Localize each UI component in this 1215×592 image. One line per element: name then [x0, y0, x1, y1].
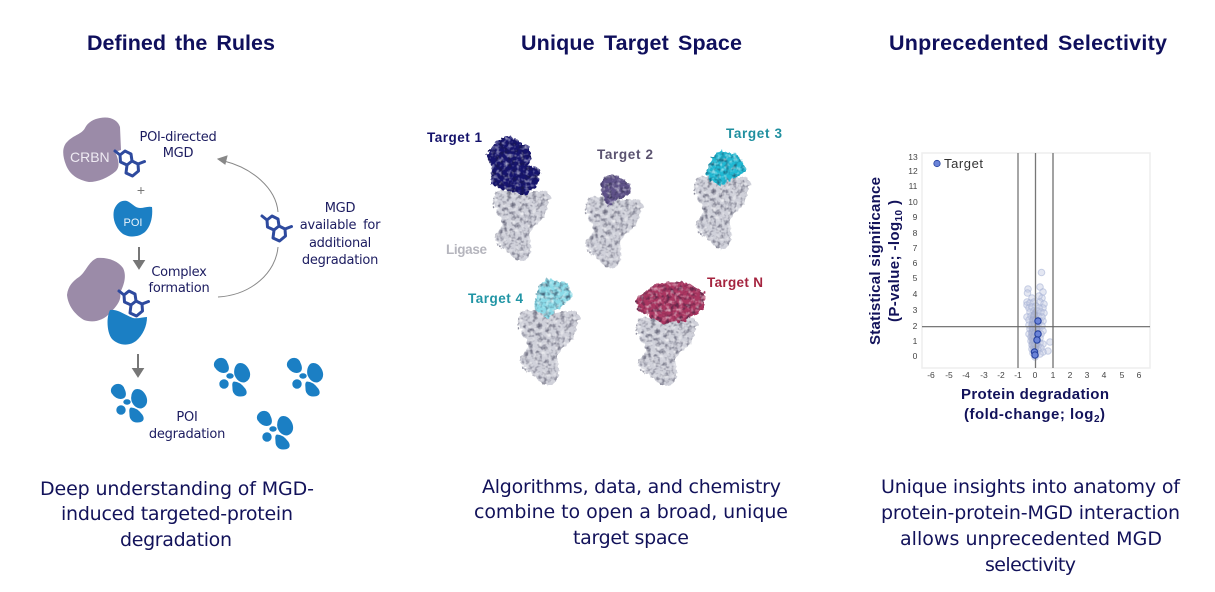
y axis ticks: 12: [908, 166, 918, 176]
text block: deep understanding: [40, 478, 314, 551]
label: complex formation: [149, 265, 209, 296]
y axis ticks: 4: [913, 289, 918, 299]
y axis ticks: 7: [913, 243, 918, 253]
arrow: POI to complex: [134, 247, 144, 268]
x axis ticks: -5: [945, 370, 953, 380]
label: MGD available for additional degradation: MGD: [325, 201, 356, 216]
point cloud: [1024, 269, 1053, 360]
x axis title: ): [1100, 406, 1105, 423]
panel: unique target space: [427, 31, 788, 549]
structure: target 1: Target 1: [427, 130, 482, 145]
y axis ticks: 9: [913, 212, 918, 222]
label: POI-directed MGD: POI-directed: [139, 130, 217, 145]
icon: POI protein: POI: [124, 217, 142, 229]
x axis ticks: -3: [980, 370, 988, 380]
legend: Target: [944, 156, 983, 171]
text block: unique insights: [881, 476, 1181, 576]
y axis ticks: 3: [913, 305, 918, 315]
x axis ticks: 4: [1102, 370, 1107, 380]
plus sign: +: [137, 182, 145, 198]
text block: unique insights: protein-protein-MGD interaction: [881, 502, 1180, 524]
x axis ticks: 1: [1051, 370, 1056, 380]
label: POI degradation: degradation: [149, 427, 225, 442]
y axis title: 10: [894, 210, 905, 221]
y axis ticks: 1: [913, 336, 918, 346]
structure: target 4: Target 4: [468, 291, 523, 306]
label: MGD available for additional degradation: [300, 201, 381, 268]
arrow: complex to degradation: [134, 354, 142, 376]
y axis ticks: 10: [908, 197, 918, 207]
x axis ticks: -6: [927, 370, 935, 380]
text block: algorithms: [474, 476, 788, 549]
text block: algorithms: combine to open a broad, unique: [474, 501, 788, 523]
icon: MGD molecule: [115, 151, 144, 176]
text block: deep understanding: degradation: [120, 529, 232, 551]
label: POI-directed MGD: [139, 130, 217, 161]
panel: defined the rules: [40, 31, 381, 551]
label: complex formation: formation: [149, 281, 209, 296]
structure: target N: Target N: [707, 275, 763, 290]
y axis ticks: 0: [913, 351, 918, 361]
structure: target 3: [696, 126, 782, 247]
structure: target 2: Target 2: [597, 147, 653, 162]
x axis ticks: [927, 370, 1142, 380]
y axis title: (P-value; -log: [886, 222, 903, 322]
label: MGD available for additional degradation: additional: [309, 236, 371, 251]
x axis ticks: 0: [1033, 370, 1038, 380]
heading: defined the rules: Defined the Rules: [87, 31, 275, 55]
y axis title: [867, 177, 905, 345]
x axis title: 2: [1094, 414, 1100, 425]
text block: deep understanding: induced targeted-protein: [61, 503, 293, 525]
y axis ticks: 5: [913, 273, 918, 283]
icon: CRBN ligase: CRBN: [70, 149, 110, 165]
x axis ticks: 2: [1068, 370, 1073, 380]
text block: unique insights: Unique insights into anatomy of: [881, 476, 1181, 498]
heading: unprecedented selectivity: Unprecedented Selectivity: [889, 31, 1167, 55]
label: ligase: Ligase: [446, 242, 487, 257]
y axis ticks: 11: [909, 181, 918, 191]
y axis ticks: 2: [913, 321, 918, 331]
arrow: recycle loop: [218, 156, 278, 297]
structure: target 2: [585, 147, 653, 268]
label: complex formation: Complex: [151, 265, 207, 280]
x axis ticks: -1: [1014, 370, 1022, 380]
label: MGD available for additional degradation: degradation: [302, 253, 378, 268]
x axis ticks: -4: [962, 370, 970, 380]
volcano chart: [867, 152, 1150, 425]
text block: unique insights: allows unprecedented MGD: [900, 528, 1162, 550]
x axis ticks: 6: [1137, 370, 1142, 380]
text block: algorithms: target space: [573, 527, 689, 549]
text block: algorithms: Algorithms, data, and chemistry: [482, 476, 781, 498]
y axis ticks: 13: [908, 152, 918, 162]
structure: target 3: Target 3: [726, 126, 782, 141]
icon: degraded fragments: [111, 358, 323, 449]
y axis title: Statistical significance: [867, 177, 884, 345]
heading: unique target space: Unique Target Space: [521, 31, 742, 55]
text block: unique insights: selectivity: [985, 554, 1076, 576]
icon: free MGD molecule: [262, 216, 292, 241]
y axis title: ): [886, 200, 903, 210]
structure: target 1: [427, 130, 548, 259]
icon: CRBN ligase: [63, 117, 121, 182]
text block: deep understanding: Deep understanding of MGD-: [40, 478, 314, 500]
x axis ticks: -2: [997, 370, 1005, 380]
x axis title: [961, 386, 1109, 425]
y axis ticks: 8: [913, 228, 918, 238]
x axis title: (fold-change; log: [964, 406, 1093, 423]
target points: [1031, 318, 1041, 358]
y axis ticks: [908, 152, 918, 361]
label: POI degradation: POI: [176, 410, 198, 425]
label: POI-directed MGD: MGD: [163, 146, 194, 161]
x axis title: Protein degradation: [961, 386, 1109, 403]
icon: POI protein: [113, 201, 152, 236]
structure: target 4: [468, 280, 578, 383]
structure: target N: [637, 275, 763, 384]
icon: ternary complex: [67, 258, 148, 345]
label: MGD available for additional degradation: available for: [300, 218, 381, 233]
y axis ticks: 6: [913, 258, 918, 268]
label: POI degradation: [149, 410, 225, 442]
x axis ticks: 5: [1120, 370, 1125, 380]
x axis ticks: 3: [1085, 370, 1090, 380]
axis lines: [922, 153, 1150, 368]
panel: unprecedented selectivity: [867, 31, 1181, 576]
